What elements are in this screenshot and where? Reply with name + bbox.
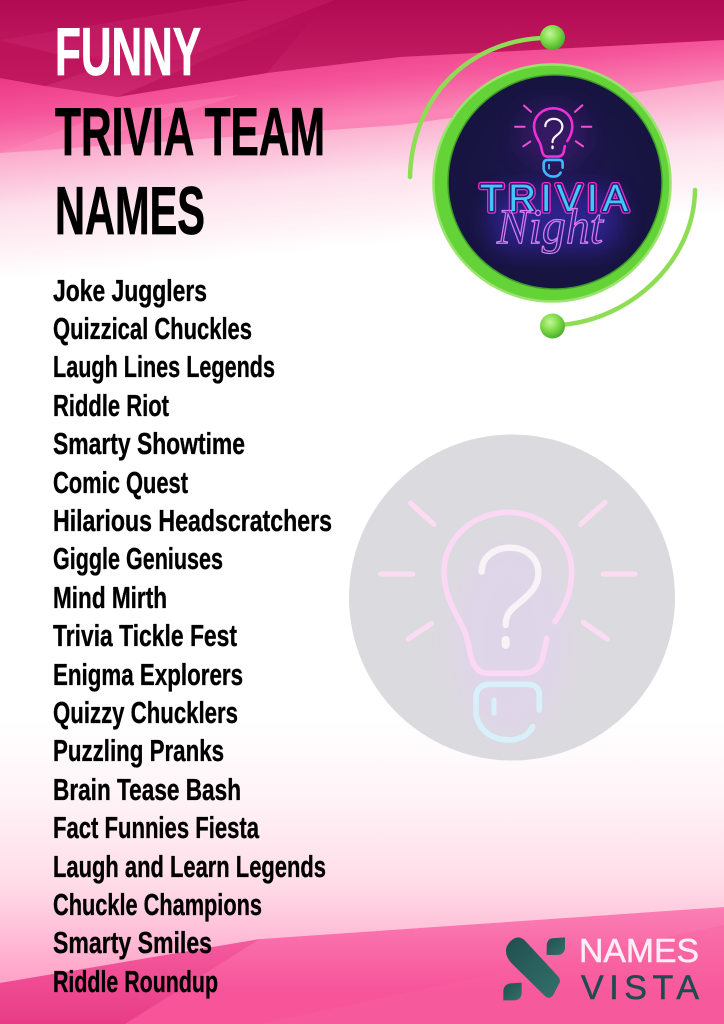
ball: top <box>540 25 565 50</box>
team names list: Puzzling Pranks <box>53 733 224 768</box>
team names list: Fact Funnies Fiesta <box>53 810 260 845</box>
team names list: Quizzical Chuckles <box>53 311 252 346</box>
logo word: VISTA: VISTA <box>581 969 699 1007</box>
team names list: Quizzy Chucklers <box>53 695 238 730</box>
neon text glow <box>490 190 620 250</box>
dark neon disc <box>448 75 662 289</box>
team names list <box>53 273 332 999</box>
arc: bottom-right green swoosh <box>560 190 695 325</box>
logo word: NAMES: NAMES <box>579 932 699 969</box>
faded bulb icon <box>381 502 635 740</box>
title line: TRIVIA TEAM: TRIVIA TEAM <box>55 94 325 170</box>
team names list: Smarty Showtime <box>53 426 245 461</box>
team names list: Chuckle Champions <box>53 887 262 922</box>
brand logo: Names Vista <box>503 932 699 1007</box>
title line: NAMES: NAMES <box>55 173 205 249</box>
green ring <box>434 64 670 302</box>
badge: trivia night neon logo in green ring <box>410 25 695 338</box>
team names list: Comic Quest <box>53 465 188 500</box>
neon word: TRIVIA: TRIVIA <box>480 178 629 220</box>
team names list: Giggle Geniuses <box>53 541 223 576</box>
team names list: Smarty Smiles <box>53 925 212 960</box>
ball: bottom <box>540 314 565 338</box>
title line: FUNNY: FUNNY <box>55 14 201 90</box>
team names list: Hilarious Headscratchers <box>53 503 332 538</box>
arc: top-left green swoosh <box>410 38 541 177</box>
team names list: Enigma Explorers <box>53 657 243 692</box>
neon bulb icon <box>515 105 591 177</box>
team names list: Riddle Roundup <box>53 964 218 999</box>
neon bulb glow <box>519 105 587 165</box>
team names list: Trivia Tickle Fest <box>53 618 237 653</box>
title <box>55 14 325 249</box>
grey disc <box>349 434 675 760</box>
logo mark <box>503 937 565 1000</box>
team names list: Mind Mirth <box>53 580 167 615</box>
team names list: Laugh and Learn Legends <box>53 849 326 884</box>
background: bottom pink waves <box>0 720 724 1024</box>
neon word: TRIVIA: TRIVIA <box>480 178 629 220</box>
team names list: Brain Tease Bash <box>53 772 241 807</box>
team names list: Laugh Lines Legends <box>53 349 275 384</box>
team names list: Riddle Riot <box>53 388 169 423</box>
neon word: TRIVIA: TRIVIA <box>480 178 629 220</box>
team names list: Joke Jugglers <box>53 273 207 308</box>
soft lilac glow <box>455 545 565 735</box>
neon word: Night: Night <box>496 198 604 254</box>
faded bulb circle <box>349 434 675 760</box>
